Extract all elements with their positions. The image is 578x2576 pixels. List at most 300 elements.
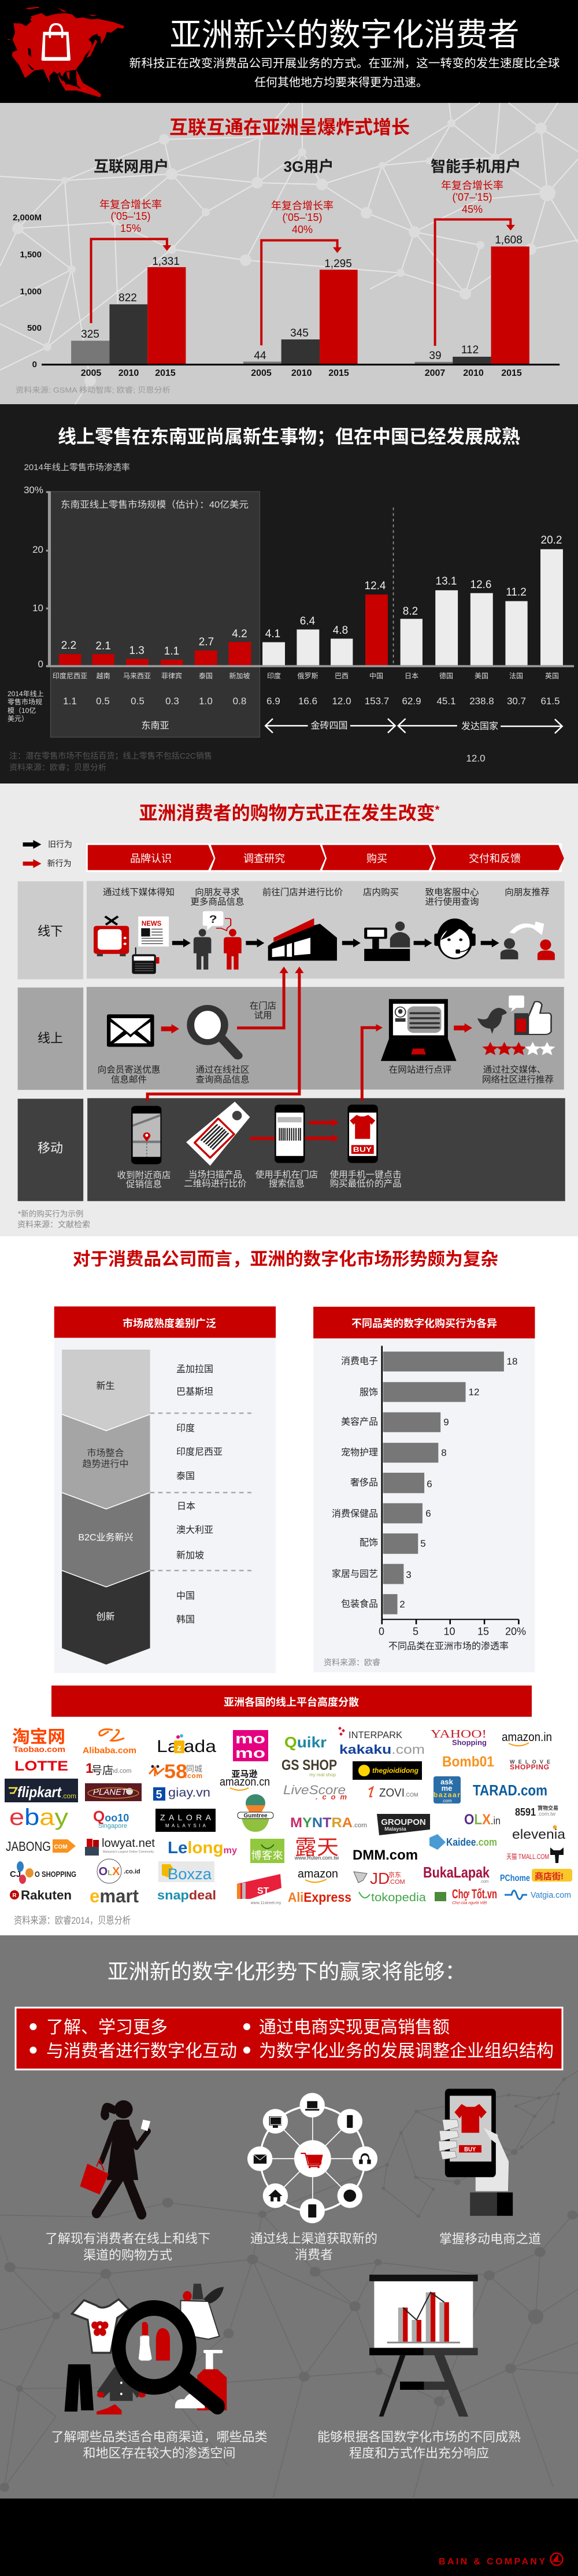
y axis labels: 1,000 <box>20 287 42 297</box>
icon: television <box>94 916 129 956</box>
column titles: 互联网用户 <box>94 158 169 175</box>
mobile step labels: 使用手机一键点击 <box>330 1169 402 1180</box>
market size values: 45.1 <box>436 696 456 707</box>
logo: zovi <box>369 1787 418 1799</box>
logo: boxza: Boxza <box>168 1865 212 1883</box>
heading: winners: 亚洲新的数字化形势下的赢家将能够： <box>108 1960 466 1983</box>
panel: connectivity growth <box>0 103 578 404</box>
bar values: 1.3 <box>129 645 144 657</box>
offline step labels: 向朋友推荐 <box>505 887 550 897</box>
logo: jabong: JABONG <box>6 1839 51 1854</box>
y axis labels: 500 <box>27 323 42 333</box>
logo: kaidee <box>429 1834 497 1850</box>
grocery bag <box>181 2283 224 2340</box>
axis labels: 30% <box>24 485 43 496</box>
icon: magnifying glass <box>191 1008 238 1056</box>
arrows <box>305 1119 339 1142</box>
footnotes: 资料来源：文献检索 <box>17 1220 90 1229</box>
arrow <box>342 938 361 947</box>
panel: market maturity <box>54 1306 276 1673</box>
legend: 新行为 <box>47 859 72 868</box>
offline step labels <box>103 887 550 907</box>
country labels: 巴西 <box>335 672 349 680</box>
logo: 11st <box>237 1874 281 1905</box>
panel: shopping behaviour <box>17 803 565 1229</box>
online step labels: 试用 <box>254 1010 272 1021</box>
logo: vatgia <box>505 1890 571 1900</box>
country labels: 马来西亚 <box>123 672 151 680</box>
callout: four capabilities: 为数字化业务的发展调整企业组织结构 <box>259 2042 554 2061</box>
category labels: 消费保健品 <box>332 1509 378 1519</box>
country labels: 新加坡 <box>229 671 250 680</box>
country labels: 越南 <box>97 671 110 680</box>
bar values: 8.2 <box>403 605 418 618</box>
market size values: 0.5 <box>96 696 110 707</box>
chevron labels <box>78 1381 134 1622</box>
country lists: 泰国 <box>176 1471 195 1481</box>
growth rate labels <box>99 180 503 235</box>
logo: askmebazaar <box>433 1776 461 1803</box>
logo: gs shop: GS SHOP <box>281 1757 337 1773</box>
bar values <box>61 534 562 657</box>
footnotes: *新的购买行为示例 <box>18 1210 83 1218</box>
logo: bomb01: Bomb01 <box>442 1754 494 1770</box>
logo: pchome store street <box>500 1869 572 1883</box>
logo: lotte: LOTTE <box>14 1758 68 1774</box>
axis labels: 20 <box>32 544 43 555</box>
category labels: 包装食品 <box>341 1599 378 1609</box>
logo: thegioididong <box>353 1761 422 1780</box>
logo: emart: emart <box>90 1886 139 1906</box>
column titles: 智能手机用户 <box>431 158 521 175</box>
callout: four capabilities <box>16 2008 562 2069</box>
logo: cj o shopping: CJ <box>10 1869 21 1879</box>
region group labels: 金砖四国 <box>310 720 348 731</box>
logo: zovi: .COM <box>405 1792 418 1798</box>
trousers <box>65 2364 94 2412</box>
icon: social media bird and like <box>477 996 551 1035</box>
country lists: 日本 <box>177 1501 195 1511</box>
logo: myntra: MYNTRA.com <box>290 1815 367 1831</box>
icon: red map of Asia with shopping bag <box>8 7 124 97</box>
source note: 资料来源：欧睿 <box>324 1658 380 1667</box>
panel: offline row <box>18 881 564 980</box>
logo: rakuten: R <box>12 1893 17 1899</box>
logo: books.com.tw <box>250 1839 284 1863</box>
y axis labels <box>13 213 42 369</box>
sneaker <box>97 2404 121 2415</box>
category labels: 服饰 <box>360 1387 378 1398</box>
logo: flipkart: .com <box>61 1792 76 1800</box>
bar values: 11.2 <box>506 586 527 598</box>
bar value labels: 325 <box>81 328 99 341</box>
logo: bukalapak: BukaLapak <box>423 1864 490 1881</box>
intro text: 新科技正在改变消费品公司开展业务的方式。在亚洲，这一转变的发生速度比全球 <box>129 57 560 70</box>
panel: category penetration <box>313 1307 535 1672</box>
logo: jd: .COM <box>388 1879 405 1886</box>
x axis ticks: 0 <box>379 1626 384 1638</box>
icon: hand holding phone <box>439 2089 513 2216</box>
market size values: 238.8 <box>469 696 494 707</box>
icon: phone with barcode <box>275 1104 305 1163</box>
logo: boxza <box>158 1861 214 1883</box>
mobile icons <box>131 1102 378 1166</box>
market size values: 6.9 <box>266 696 280 707</box>
bar values: 2.1 <box>95 640 111 652</box>
caption: categories: 了解哪些品类适合电商渠道，哪些品类 <box>51 2430 268 2444</box>
column titles <box>94 158 521 175</box>
bar values: 18 <box>507 1356 517 1367</box>
logo: yhd: 1 <box>86 1761 93 1776</box>
region group labels <box>141 720 498 731</box>
icon: phone with buy button <box>347 1104 378 1163</box>
caption: acquire consumers: 通过线上渠道获取新的 <box>250 2231 377 2246</box>
bar value labels: 1,295 <box>324 258 352 270</box>
banner: online platforms <box>51 1686 532 1717</box>
logo: amazon china <box>220 1769 270 1790</box>
online step labels: 信息邮件 <box>111 1074 147 1085</box>
logo: jd <box>354 1869 405 1887</box>
bar values: 6 <box>427 1479 432 1490</box>
offline step labels: 进行使用查询 <box>425 896 479 907</box>
country lists: 中国 <box>176 1591 195 1601</box>
logo: 8591: 寶物交易 <box>538 1805 558 1811</box>
country labels: 印度尼西亚 <box>53 671 87 680</box>
year labels <box>81 368 522 378</box>
logo: 58 <box>149 1761 202 1783</box>
callout: four capabilities: 与消费者进行数字化互动 <box>46 2042 237 2061</box>
heading: connectivity: 互联互通在亚洲呈爆炸式增长 <box>169 117 410 138</box>
logo: groupon: GROUPON <box>381 1817 426 1827</box>
logo: askmebazaar: .com <box>442 1798 452 1803</box>
legend: 旧行为 <box>48 840 72 849</box>
caption: categories <box>51 2430 268 2460</box>
online step labels: 通过社交媒体、 <box>483 1065 546 1075</box>
logo: dmm: DMM.com <box>353 1847 418 1863</box>
bar values: 12 <box>469 1387 479 1398</box>
region arrows <box>265 719 562 733</box>
market size values: 30.7 <box>507 696 526 707</box>
network background pattern <box>0 2071 578 2499</box>
country labels: 中国 <box>369 671 383 680</box>
logo: livescore: .com <box>316 1793 347 1801</box>
growth rate labels: 年复合增长率 <box>271 200 334 212</box>
country lists: 韩国 <box>176 1614 195 1625</box>
online step labels: 在门店 <box>250 1001 276 1011</box>
country labels: 美国 <box>475 672 488 680</box>
caption: know consumers <box>45 2231 210 2263</box>
logo: zalora <box>155 1809 216 1832</box>
online step labels: 在网站进行点评 <box>389 1065 451 1075</box>
panel: online row: 线上 <box>38 1031 63 1045</box>
logo: yahoo shopping: Shopping <box>452 1738 487 1747</box>
logo: ruten: 露天 <box>295 1835 339 1859</box>
logo: elevenia: elevenia <box>512 1827 565 1842</box>
logo: qoo10: Singapore <box>98 1823 127 1830</box>
category labels: 家居与园艺 <box>332 1569 378 1579</box>
footer brand: BAIN & COMPANY <box>439 2557 545 2567</box>
logo: 8591 <box>515 1805 558 1818</box>
region group labels: 发达国家 <box>461 721 498 731</box>
country labels: 英国 <box>545 672 559 680</box>
arrow <box>414 938 432 947</box>
bar values: 4.8 <box>333 624 348 637</box>
country labels: 泰国 <box>199 672 213 680</box>
country lists: 澳大利亚 <box>176 1525 213 1535</box>
market size values: 1.0 <box>199 696 213 707</box>
logo: momo: mo <box>235 1746 265 1761</box>
logo: yahoo shopping <box>431 1728 487 1747</box>
heading: complexity: 对于消费品公司而言，亚洲的数字化市场形势颇为复杂 <box>73 1249 498 1269</box>
offline step labels: 店内购买 <box>363 887 399 897</box>
bar values: 12.6 <box>470 579 491 591</box>
country lists: 巴基斯坦 <box>176 1387 213 1397</box>
icon: star rating <box>482 1042 555 1055</box>
arrow <box>246 938 264 947</box>
logo: 8591: .com.tw <box>538 1811 556 1817</box>
year labels: 2015 <box>501 368 522 378</box>
logo: snapdeal: snapdeal <box>157 1888 216 1902</box>
logo: chotot: Chợ của người Việt <box>452 1901 487 1905</box>
logo: lelong: Lelongmy <box>168 1839 237 1857</box>
market size values: 0.8 <box>233 696 246 707</box>
logo: ruten: www.Ruten.com.tw <box>294 1855 339 1861</box>
icon: barcode price tag <box>186 1102 250 1166</box>
market size row label: 2014年线上 <box>8 690 44 698</box>
header panel <box>8 7 560 97</box>
caption: mobile commerce: 掌握移动电商之道 <box>439 2232 541 2246</box>
market size row label <box>8 690 44 723</box>
caption: categories: 和地区存在较大的渗透空间 <box>83 2446 236 2460</box>
maturity chevrons <box>62 1350 251 1665</box>
network background pattern <box>0 103 578 404</box>
footnotes <box>9 751 212 773</box>
illustrations <box>65 2089 513 2416</box>
year labels: 2010 <box>118 368 139 378</box>
stray value: 12.0 <box>466 753 486 764</box>
bar values: 4.2 <box>232 628 247 640</box>
arrow <box>161 1024 179 1033</box>
x axis ticks <box>379 1626 526 1638</box>
logo: kakaku: kakaku .com <box>339 1742 425 1757</box>
country labels: 俄罗斯 <box>297 672 318 680</box>
growth rate labels: 年复合增长率 <box>441 180 503 191</box>
growth rate labels: ('07–'15) <box>453 191 492 203</box>
market size values: 1.1 <box>63 696 77 707</box>
online step labels: 网络社区进行推荐 <box>482 1074 554 1085</box>
logo wall <box>5 1727 572 1906</box>
chevron labels: 创新 <box>96 1612 115 1622</box>
bar value labels: 39 <box>429 350 442 362</box>
bar value labels: 1,331 <box>152 256 180 268</box>
process chevrons <box>86 843 564 872</box>
mobile step labels: 当场扫描产品 <box>188 1169 242 1180</box>
caption: respond to maturity: 能够根据各国数字化市场的不同成熟 <box>317 2430 521 2444</box>
bar values: 2 <box>399 1599 405 1610</box>
logo: lowyat: lowyat.net <box>102 1837 155 1850</box>
logo: tarad: TARAD.com <box>473 1782 547 1799</box>
chevron labels: 市场整合 <box>87 1448 124 1458</box>
icon: cash register <box>364 922 410 961</box>
country labels: 印度 <box>267 671 281 680</box>
year labels: 2005 <box>251 368 272 378</box>
logo: taobao: Taobao.com <box>13 1745 65 1754</box>
bar values: 1.1 <box>164 645 179 657</box>
intro text <box>129 57 560 89</box>
year labels: 2010 <box>463 368 484 378</box>
column titles: 3G用户 <box>284 158 334 175</box>
year labels: 2010 <box>291 368 312 378</box>
icon: newspaper: NEWS <box>142 919 161 927</box>
market size row label: 美元） <box>8 715 28 723</box>
icon: radio <box>132 947 160 974</box>
arrow <box>481 938 499 947</box>
onesie <box>72 2300 129 2353</box>
offline step labels: 致电客服中心 <box>425 887 479 897</box>
panel: mobile row <box>18 1098 565 1201</box>
new behaviour red connector lines <box>147 967 383 1101</box>
mobile step labels: 收到附近商店 <box>117 1170 171 1181</box>
arrow <box>172 938 191 947</box>
source note: 资料来源: GSMA 移动智库; 欧睿; 贝恩分析 <box>16 386 171 394</box>
market size values: 61.5 <box>540 696 560 707</box>
logo: olx indonesia: OLX <box>99 1865 120 1878</box>
caption: know consumers: 了解现有消费者在线上和线下 <box>45 2231 210 2246</box>
country labels <box>53 671 559 680</box>
panel: winners <box>0 1960 578 2499</box>
logo: gumtree: Gumtree <box>243 1813 268 1819</box>
icon: product categories under magnifier <box>65 2283 227 2415</box>
logo: zalora: ZALORA <box>160 1813 212 1822</box>
logo: groupon: Malaysia <box>384 1826 407 1832</box>
logo: bukalapak: .com <box>480 1880 489 1884</box>
logo: thegioididong: thegioididong <box>372 1766 419 1775</box>
logo: yahoo shopping: YAHOO! <box>431 1728 487 1740</box>
online step labels: 查询商品信息 <box>195 1074 250 1085</box>
logo: kaidee: Kaidee.com <box>446 1836 497 1848</box>
logo: planet: PLANET <box>93 1787 128 1797</box>
caption: respond to maturity: 程度和方式作出充分响应 <box>349 2446 489 2460</box>
bar chart: users <box>42 234 560 378</box>
logo: flipkart: flipkart <box>17 1783 62 1801</box>
icon: phone with buy button: BUY <box>353 1145 372 1154</box>
logo: qoo10: Qoo10 <box>93 1808 129 1825</box>
year labels: 2007 <box>425 368 445 378</box>
bar value labels: 822 <box>118 292 137 304</box>
heading: shopping behaviour: 亚洲消费者的购物方式正在发生改变 <box>139 803 435 823</box>
country labels: 德国 <box>439 671 453 680</box>
category labels: 宠物护理 <box>341 1447 378 1458</box>
chevron labels: B2C业务新兴 <box>78 1532 134 1543</box>
logo: livescore <box>283 1783 347 1801</box>
logo: 11st: ST <box>257 1886 269 1896</box>
logo: groupon <box>377 1814 430 1835</box>
country lists <box>176 1364 223 1625</box>
bar values: 9 <box>443 1417 449 1428</box>
footnotes: 资料来源：欧睿；贝恩分析 <box>9 763 106 773</box>
callout: four capabilities: 了解、学习更多 <box>46 2018 168 2037</box>
offline step labels: 向朋友寻求 <box>195 887 240 897</box>
logo: lowyat <box>85 1837 155 1856</box>
source note: 资料来源：欧睿2014，贝恩分析 <box>14 1915 131 1926</box>
heading: shopping behaviour: * <box>435 804 440 816</box>
offline step labels: 前往门店并进行比价 <box>262 887 343 897</box>
bar values: 20.2 <box>541 534 562 546</box>
market size values: 16.6 <box>298 696 317 707</box>
category labels: 消费电子 <box>341 1356 378 1366</box>
logo: vatgia: Vatgia.com <box>531 1890 571 1900</box>
panel: category penetration: 不同品类的数字化购买行为各异 <box>351 1317 497 1329</box>
logo: 5giay <box>153 1786 210 1801</box>
logo: 5giay: 5 <box>155 1788 162 1801</box>
logo: zovi: ZOVI <box>379 1787 405 1799</box>
logo: momo <box>233 1730 268 1761</box>
online step labels: 通过在线社区 <box>195 1065 250 1075</box>
icon: store <box>268 918 337 960</box>
icon: recommend to a friend <box>501 922 555 960</box>
caption: know consumers: 渠道的购物方式 <box>83 2248 172 2263</box>
icon: woman shopping with phone <box>80 2100 150 2214</box>
growth rate labels: ('05–'15) <box>283 212 322 223</box>
bar value labels: 345 <box>290 327 309 339</box>
bar values: 12.4 <box>365 580 386 592</box>
logo: quikr: Quikr <box>284 1734 327 1751</box>
category labels: 美容产品 <box>341 1417 378 1427</box>
jacket <box>97 2364 146 2401</box>
market size values: 0.5 <box>131 696 144 707</box>
logo: amazon china: amazon.cn <box>220 1776 270 1788</box>
mobile step labels <box>117 1169 402 1189</box>
y axis labels: 2,000M <box>13 213 42 223</box>
logo: pchome store street: PChome <box>500 1873 530 1883</box>
x axis ticks: 10 <box>443 1626 455 1638</box>
logo: askmebazaar: me <box>442 1784 452 1793</box>
country lists: 新加坡 <box>176 1550 204 1561</box>
market size values: 12.0 <box>332 696 351 707</box>
logo: 58: 58 <box>164 1761 187 1783</box>
logo: jd: 京东 <box>388 1871 401 1879</box>
panel: online row <box>18 987 564 1090</box>
mobile step labels: 二维码进行比价 <box>184 1178 247 1189</box>
bar values: 5 <box>420 1538 426 1549</box>
country labels: 日本 <box>405 672 418 680</box>
logo: yhd: 号店 <box>91 1764 113 1777</box>
logo: gumtree <box>238 1794 273 1832</box>
online step labels <box>98 1001 554 1085</box>
panel: digital landscape complexity <box>54 1249 535 1673</box>
banner: online platforms: 亚洲各国的线上平台高度分散 <box>224 1696 359 1708</box>
bar value labels <box>81 234 523 362</box>
bar values: 6 <box>425 1508 431 1519</box>
icon: envelope <box>107 1014 154 1047</box>
country lists: 印度尼西亚 <box>176 1447 223 1457</box>
mobile step labels: 使用手机在门店 <box>255 1169 318 1180</box>
online icons <box>107 996 555 1061</box>
y axis labels: 1,500 <box>20 250 42 260</box>
title: 亚洲新兴的数字化消费者 <box>169 17 520 53</box>
bar values: 13.1 <box>436 575 457 587</box>
chevron labels: 趋势进行中 <box>82 1459 129 1469</box>
online step labels: 向会员寄送优惠 <box>98 1065 160 1075</box>
logo: jabong: COM <box>54 1844 68 1850</box>
market size values: 0.3 <box>165 696 179 707</box>
logo: pchome store street: 商店街! <box>535 1871 564 1882</box>
market size values: 153.7 <box>365 696 389 707</box>
logo: aliexpress: AliExpress <box>288 1890 351 1905</box>
logo: lazada: La ada <box>157 1737 216 1756</box>
logo: tmall: 天猫 TMALL.COM <box>506 1853 549 1861</box>
arrow line <box>250 1137 275 1140</box>
